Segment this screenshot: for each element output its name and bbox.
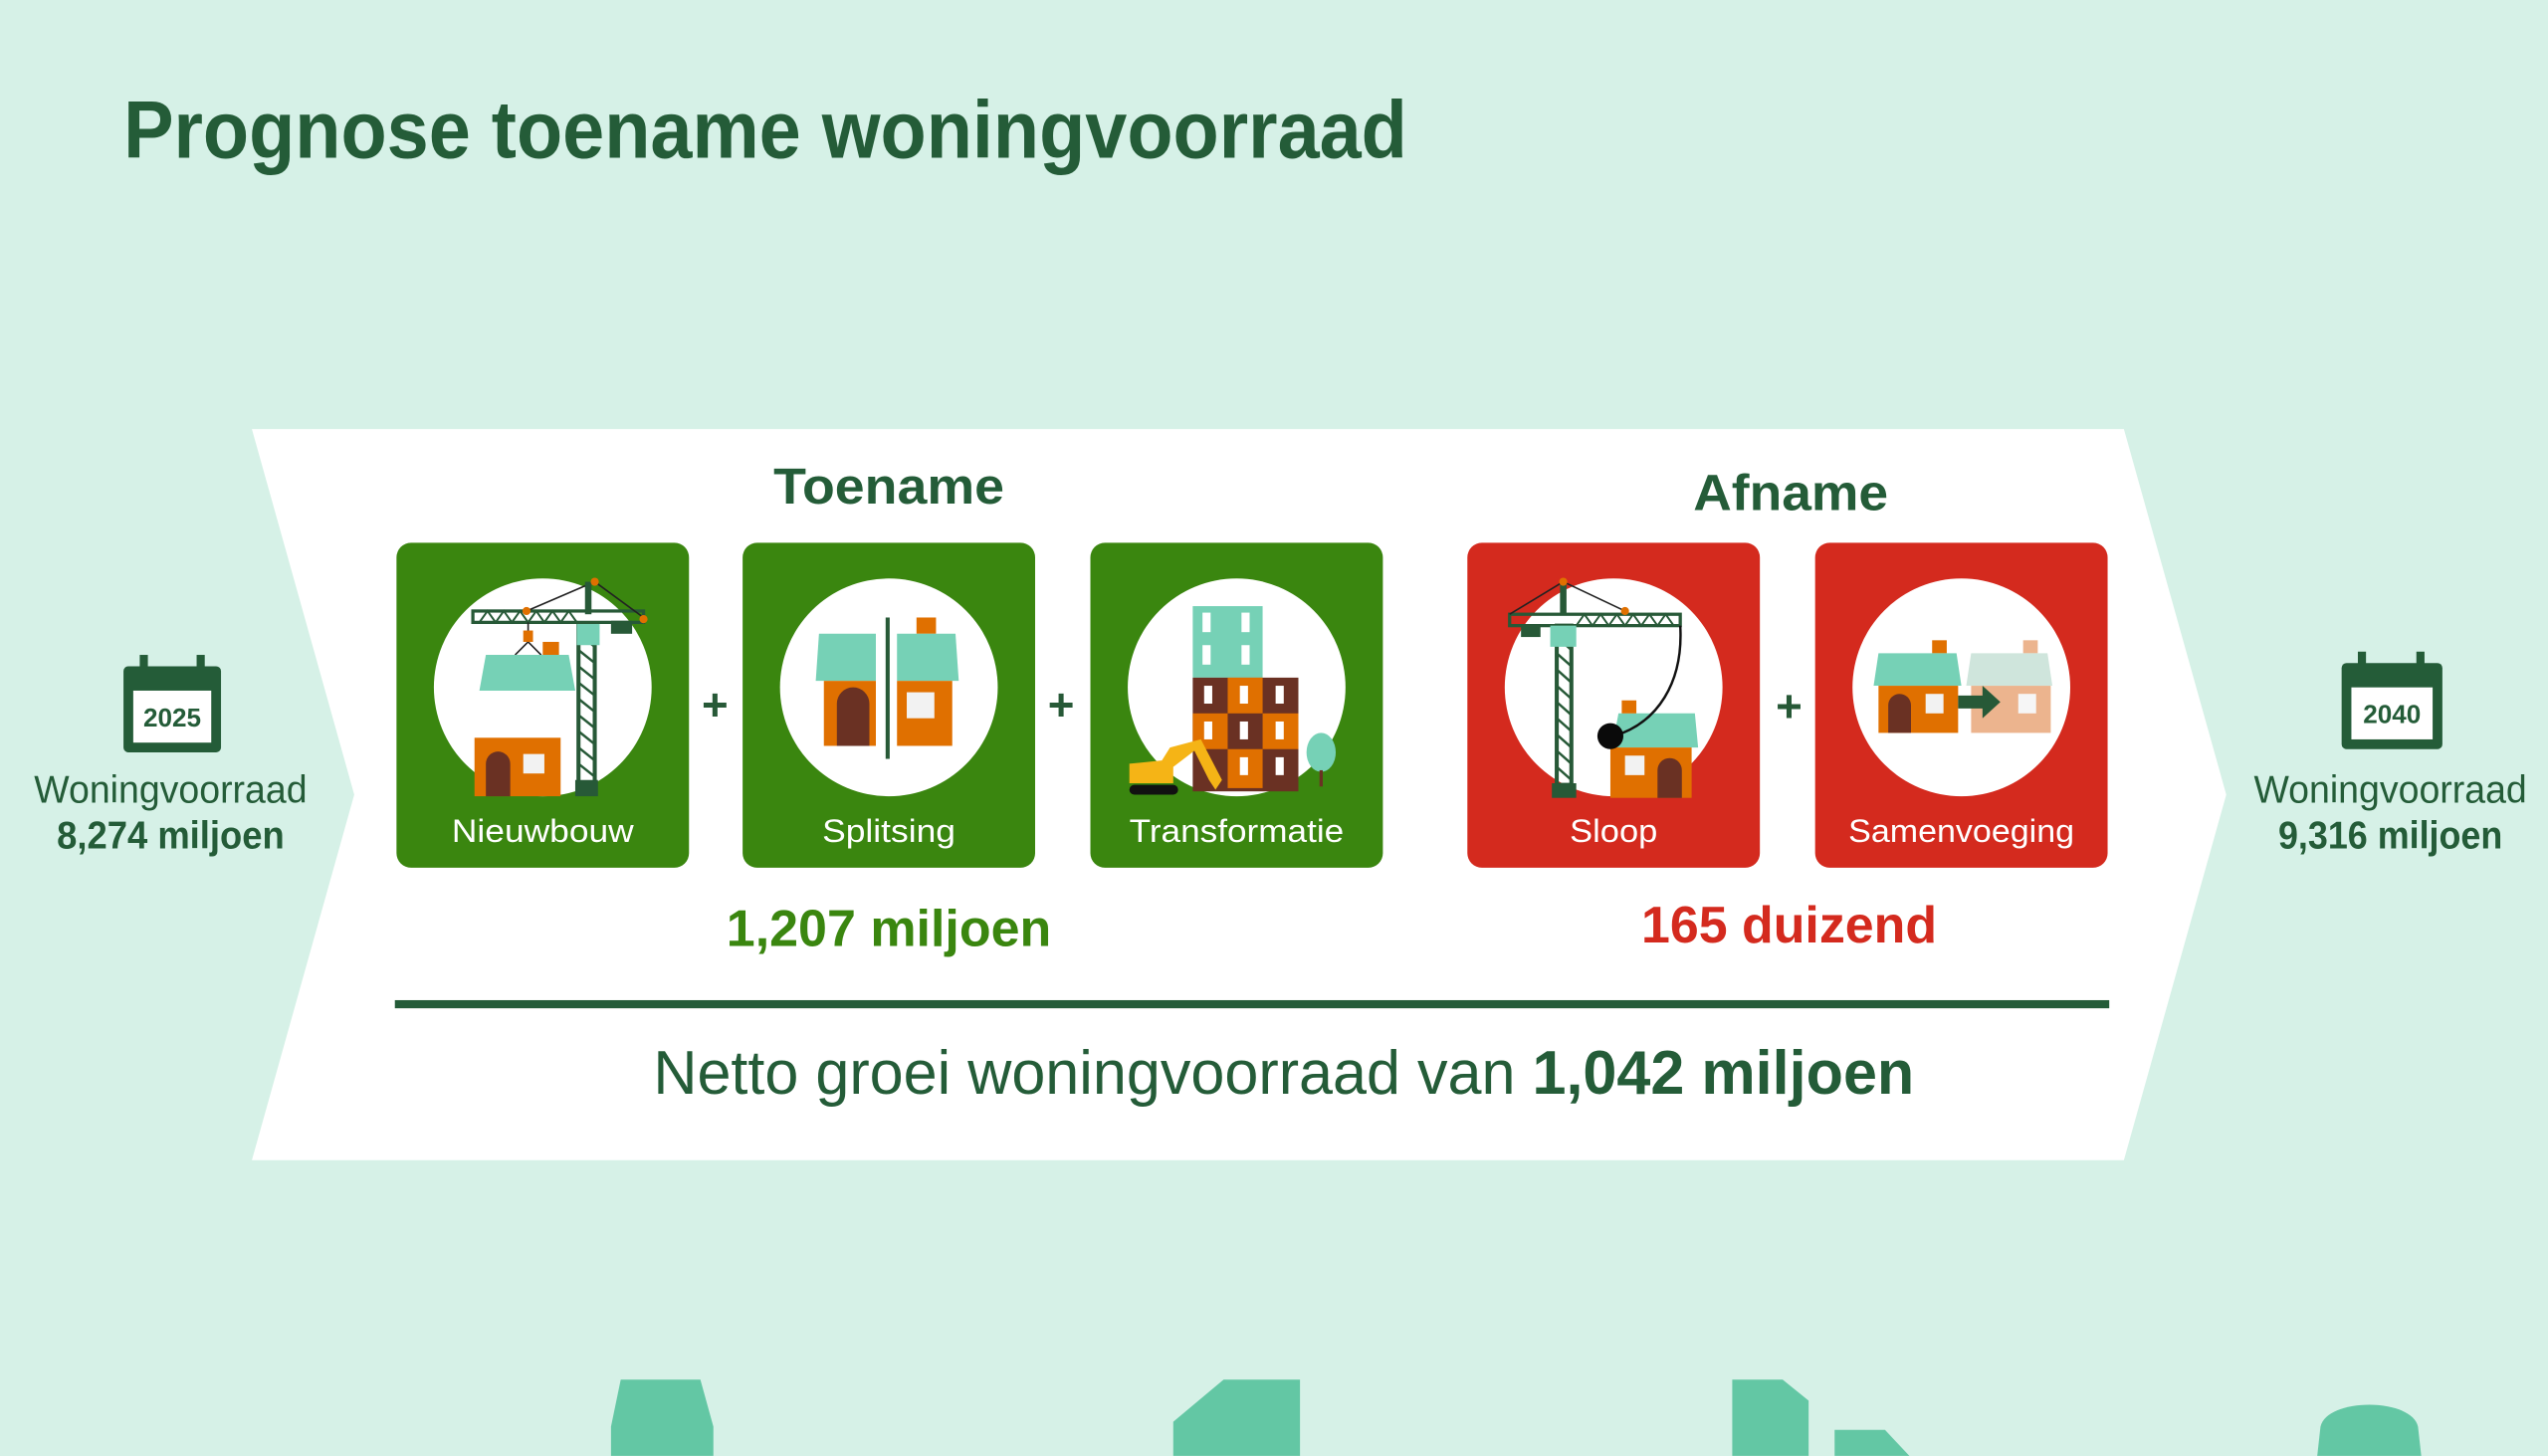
panel: Samenvoeging [1815, 542, 2108, 868]
start: 2025 stock: Woningvoorraad [34, 769, 308, 812]
heading: Toename: Toename [773, 458, 1004, 515]
panel: Splitsing [743, 542, 1035, 868]
icon: crane with house [473, 577, 648, 796]
label: Nieuwbouw: Nieuwbouw [452, 812, 634, 849]
panel: Sloop [1467, 542, 1760, 868]
start: 2025 stock [34, 655, 308, 857]
label: Transformatie: Transformatie [1130, 812, 1344, 849]
plus sign: + [1048, 679, 1074, 729]
icon: calendar 2025: 2025 [143, 703, 201, 732]
end: 2040 stock: Woningvoorraad [2253, 769, 2527, 812]
label: Samenvoeging: Samenvoeging [1848, 812, 2074, 849]
icon: split house [816, 617, 958, 759]
end: 2040 stock [2253, 652, 2527, 857]
icon: calendar 2040: 2040 [2363, 700, 2421, 729]
panel: Transformatie [1091, 542, 1382, 868]
label: Sloop: Sloop [1570, 812, 1657, 849]
skyline silhouettes [611, 1379, 2422, 1456]
icon: building transformation [1130, 606, 1336, 794]
plus sign: + [1776, 681, 1803, 731]
total: toename: 1,207 miljoen [727, 900, 1051, 957]
start: 2025 stock: 8,274 miljoen [57, 814, 285, 857]
heading: Afname: Afname [1693, 465, 1888, 521]
icon: calendar 2040 [2342, 652, 2442, 749]
icon: crane with wrecking ball [1510, 577, 1698, 798]
white arrow band [252, 429, 2227, 1160]
plus sign: + [702, 679, 729, 729]
total: afname: 165 duizend [1641, 897, 1937, 954]
title: Prognose toename woningvoorraad [123, 85, 1407, 175]
net growth text: Netto groei woningvoorraad van 1,042 miljoen [653, 1039, 1914, 1108]
panel: Nieuwbouw [396, 542, 689, 868]
icon: calendar 2025 [123, 655, 221, 752]
label: Splitsing: Splitsing [822, 812, 956, 849]
end: 2040 stock: 9,316 miljoen [2278, 814, 2502, 857]
icon: merging houses [1873, 640, 2052, 732]
